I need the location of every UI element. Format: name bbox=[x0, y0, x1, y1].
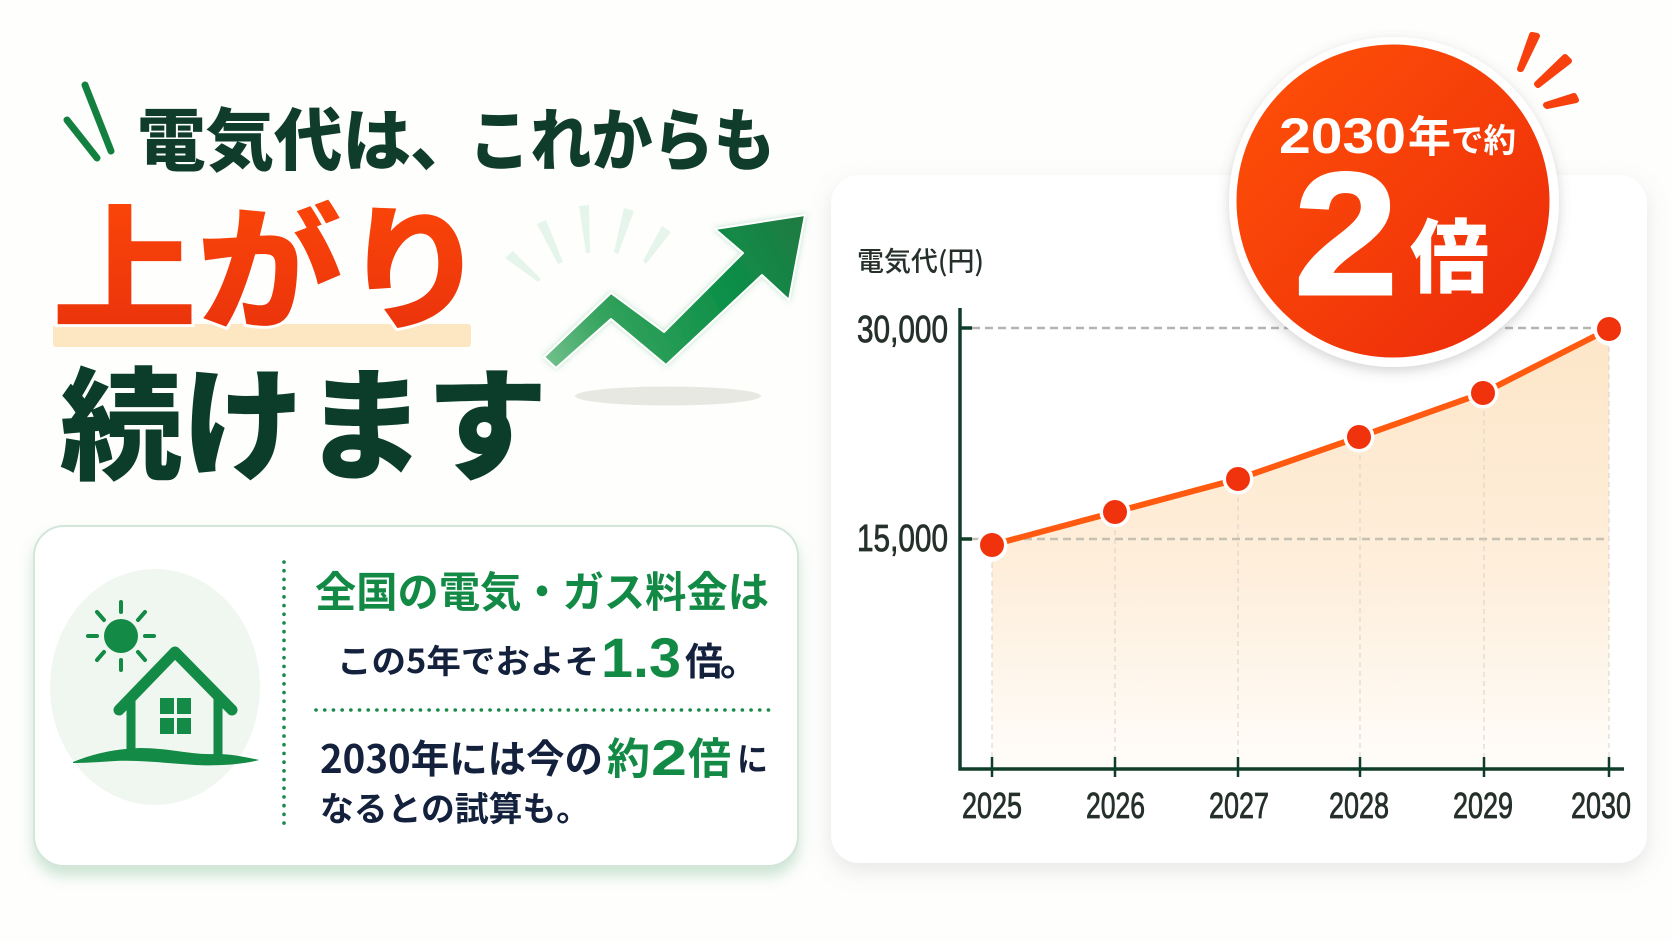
badge text: 2倍: 倍 bbox=[1410, 194, 1489, 310]
badge text: 2030年で約: で約 bbox=[1451, 114, 1516, 162]
text: 2030 forecast statement: 約 bbox=[607, 725, 650, 787]
chart: x axis labels: 2029 bbox=[1453, 785, 1513, 826]
chart: x axis labels: 2025 bbox=[962, 785, 1022, 826]
chart: y axis labels bbox=[857, 309, 948, 560]
heading: first line: 、 bbox=[410, 86, 476, 185]
panel: chart card bbox=[831, 175, 1647, 863]
text: 2030 forecast statement: なるとの試算も。 bbox=[320, 782, 590, 831]
chart: y axis title: 電気代(円) bbox=[857, 240, 984, 279]
badge text: 2030年で約: 2030 bbox=[1279, 108, 1406, 164]
badge text: 2倍 bbox=[1294, 136, 1489, 331]
text: 2030 forecast statement: 倍 bbox=[688, 725, 731, 787]
text: 1.3x statement bbox=[337, 626, 760, 689]
chart: axes and ticks bbox=[960, 308, 1624, 777]
heading: red emphasis: 上がり bbox=[52, 161, 487, 357]
icon: red sparks bbox=[1520, 35, 1576, 106]
text: 2030 forecast statement: 2030年には今の bbox=[320, 729, 603, 785]
badge: 2030 doubling callout bbox=[1229, 37, 1559, 367]
chart: x axis labels: 2026 bbox=[1086, 785, 1145, 826]
text: 2030 forecast statement: 2 bbox=[651, 730, 687, 786]
chart: x axis labels bbox=[962, 785, 1631, 826]
chart: trend line bbox=[992, 329, 1609, 545]
text: 1.3x statement: 1.3 bbox=[601, 626, 681, 689]
chart: shaded area bbox=[992, 329, 1609, 769]
chart: x axis labels: 2030 bbox=[1571, 785, 1631, 826]
divider: horizontal dots bbox=[316, 708, 773, 712]
heading: first line: これからも bbox=[469, 86, 775, 185]
panel: summary card bbox=[34, 526, 798, 866]
chart: electricity cost line chart bbox=[857, 240, 1631, 826]
arrow ground shadow bbox=[575, 386, 761, 406]
text: 1.3x statement: この5年でおよそ bbox=[337, 635, 599, 683]
text: 2030 forecast statement bbox=[320, 725, 768, 831]
gridlines bbox=[972, 328, 1609, 757]
heading: third line: 続けます bbox=[60, 329, 548, 506]
badge text: 2倍: 2 bbox=[1294, 136, 1398, 331]
badge text: 2030年で約 bbox=[1279, 103, 1516, 165]
arrow: upward trend bbox=[544, 215, 805, 368]
text: 1.3x statement: 。 bbox=[720, 629, 760, 687]
text: national price heading: 全国の電気・ガス料金は bbox=[315, 559, 769, 620]
chart: x axis labels: 2027 bbox=[1209, 785, 1269, 826]
chart: x axis labels: 2028 bbox=[1329, 785, 1389, 826]
chart: y axis labels: 30,000 bbox=[857, 309, 948, 351]
badge text: 2030年で約: 年 bbox=[1408, 103, 1451, 165]
heading: first line bbox=[137, 86, 775, 185]
text: 1.3x statement: 倍 bbox=[685, 631, 723, 686]
chart: data point markers bbox=[976, 314, 1624, 562]
divider: vertical dots bbox=[282, 562, 286, 827]
chart: y axis labels: 15,000 bbox=[857, 518, 948, 560]
icon: green accent ticks bbox=[67, 85, 111, 158]
heading: first line: 電気代は bbox=[137, 86, 411, 185]
highlight under red heading bbox=[53, 324, 471, 347]
icon: house and sun bbox=[50, 569, 260, 805]
text: 2030 forecast statement: に bbox=[737, 733, 768, 781]
icon: light rays behind arrow bbox=[505, 205, 671, 282]
